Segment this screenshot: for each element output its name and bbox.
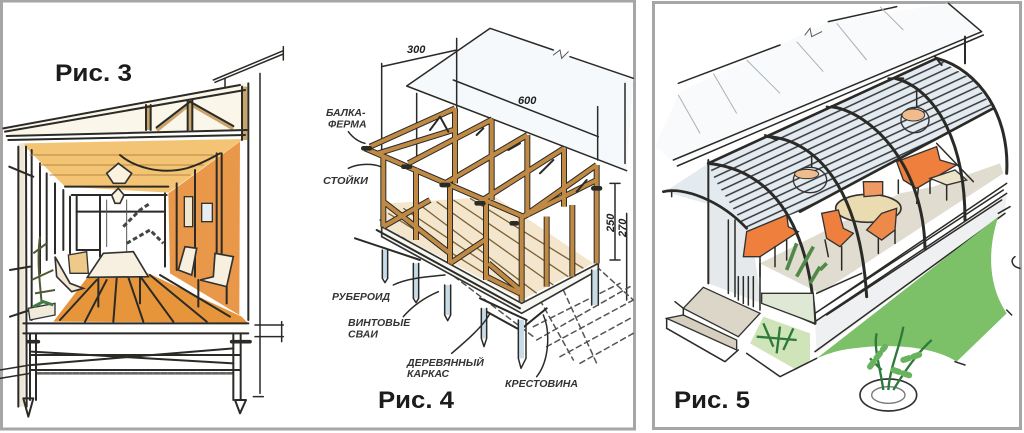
dimension: 250: 250: [605, 213, 617, 233]
heading: figure 5: Рис. 5: [674, 387, 750, 414]
label: wooden frame: КАРКАС: [407, 368, 450, 380]
tree in circular bed: [860, 327, 932, 411]
ceiling: [22, 139, 243, 193]
floor: [760, 163, 1003, 293]
floor deck: [383, 197, 593, 300]
pendant lamps: [793, 90, 929, 193]
round table: [836, 194, 901, 222]
leader lines: [348, 132, 548, 377]
back window: [65, 187, 168, 267]
dimension: 300: 300: [407, 44, 426, 56]
floor beam and foundation: [0, 322, 283, 417]
transparent arched roof: [663, 58, 993, 230]
truss connectors and joints: [363, 117, 600, 223]
plants: [28, 203, 163, 320]
label: balka-ferma: БАЛКА-: [326, 107, 366, 119]
label: stoyki: СТОЙКИ: [323, 174, 368, 187]
wall posts and pictures: [177, 153, 222, 277]
label: screw piles: ВИНТОВЫЕ: [348, 317, 410, 329]
timber frame outline: [365, 108, 597, 302]
ceiling planks and lamps: [30, 153, 220, 203]
heading: figure 3: Рис. 3: [55, 60, 132, 87]
illustration: figure 5 arched veranda: [655, 3, 1020, 411]
label: wooden frame: ДЕРЕВЯННЫЙ: [407, 357, 484, 369]
sofa and side table right: [897, 143, 973, 203]
chairs: [822, 182, 897, 270]
panel frame: figure 5: [654, 2, 1020, 428]
label: balka-ferma: ФЕРМА: [328, 118, 367, 130]
base slab: [355, 227, 598, 330]
lower side boards: [815, 183, 1007, 353]
entrance railing and door: [728, 220, 862, 323]
right orange wall: [168, 142, 240, 315]
dimension lines: [382, 38, 627, 300]
illustration: figure 4 frame structure: [348, 28, 633, 377]
table: [87, 252, 148, 307]
green bed and shrub: [747, 317, 817, 377]
label: ruberoid: РУБЕРОИД: [332, 291, 390, 303]
dimension: 270: 270: [617, 218, 629, 238]
timber frame fill: [365, 108, 597, 302]
dimension ticks and lawn outline: [672, 190, 1020, 365]
lawn: [817, 217, 1007, 362]
ground grid: [380, 220, 633, 363]
side wall: [708, 200, 762, 303]
panel frame: figures 3 and 4: [2, 1, 634, 429]
house roof: [655, 3, 983, 166]
entry steps: [667, 287, 760, 362]
floor: [53, 273, 247, 323]
dimension: 600: 600: [518, 95, 537, 107]
heading: figure 4: Рис. 4: [378, 387, 455, 414]
climbing plants: [787, 243, 827, 283]
armchairs: [55, 247, 233, 307]
arches: [708, 37, 1007, 323]
floor planks: [60, 275, 230, 322]
bench and table left: [743, 215, 798, 277]
screw piles: [382, 250, 598, 368]
roof and truss: [3, 47, 283, 393]
label: cross brace: КРЕСТОВИНА: [505, 378, 578, 390]
house roof outline: [407, 28, 633, 171]
illustration: figure 3 veranda section: [0, 47, 283, 417]
left columns and windows: [9, 143, 77, 407]
label: screw piles: СВАИ: [348, 328, 378, 340]
